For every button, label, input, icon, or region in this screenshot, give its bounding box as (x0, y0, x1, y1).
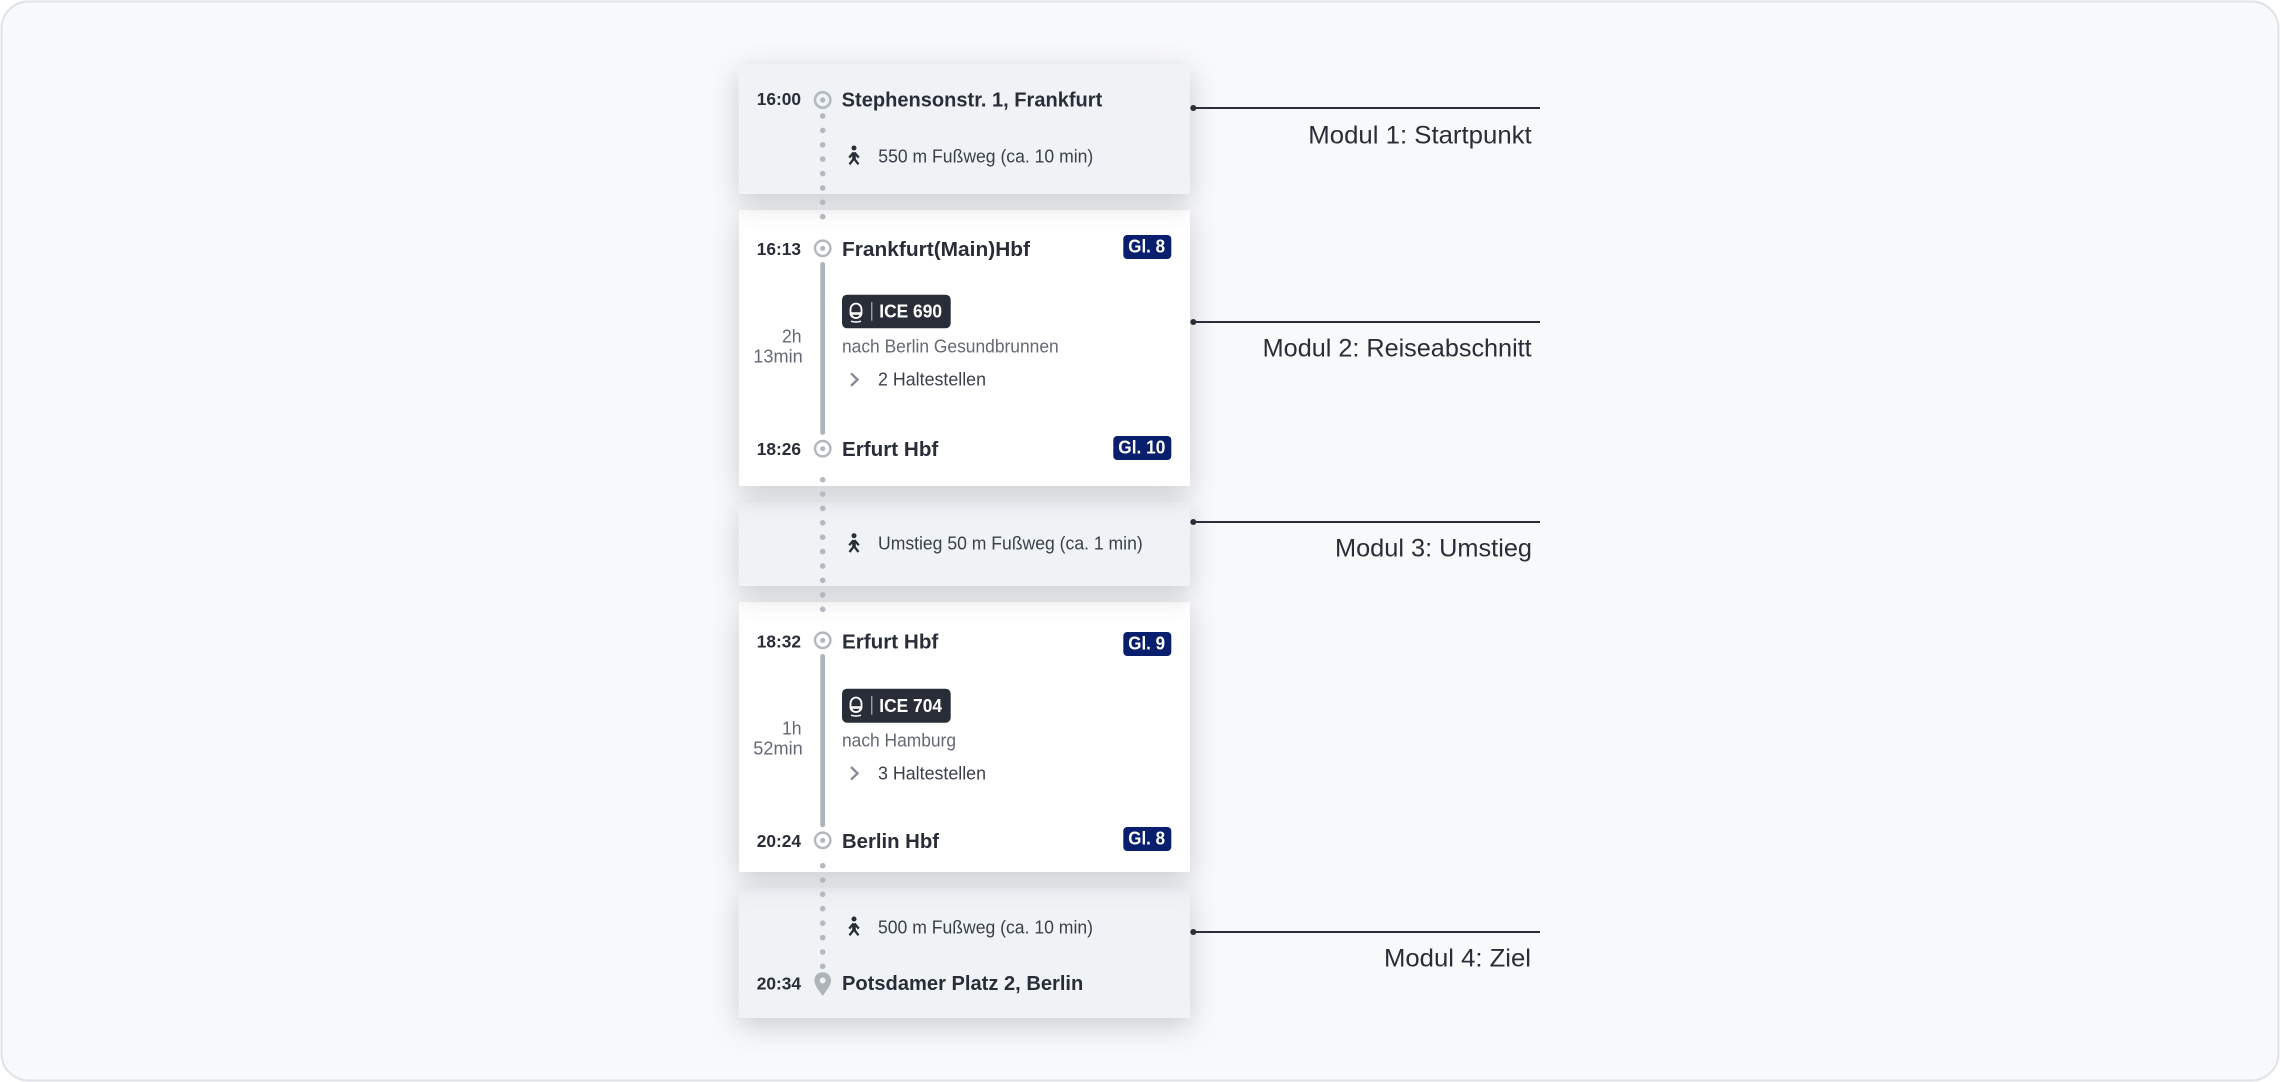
text: station Erfurt Hbf: Erfurt Hbf (842, 631, 939, 653)
icon: train front (850, 304, 862, 322)
text: start address: Stephensonstr. 1, Frankfurt (842, 90, 1103, 112)
text: station Berlin Hbf: Berlin Hbf (842, 831, 939, 853)
text: duration (753, 325, 803, 366)
badge: train ICE 704: ICE 704 (879, 696, 942, 716)
text: station Frankfurt(Main)Hbf: Frankfurt(Main)Hbf (842, 239, 1030, 261)
panel: module 2 first journey leg (739, 210, 1190, 486)
badge: platform 8: Gl. 8 (1128, 828, 1165, 848)
badge: platform 9: Gl. 9 (1128, 634, 1165, 654)
callout: module 1: Modul 1: Startpunkt (1308, 121, 1532, 149)
journey line (820, 654, 825, 827)
text: walking distance: 550 m Fußweg (ca. 10 min) (878, 146, 1093, 167)
icon: walking person (849, 533, 859, 552)
callout: module 3: Modul 3: Umstieg (1335, 535, 1532, 563)
text: stops: 2 Haltestellen (878, 368, 986, 389)
journey line (820, 262, 825, 435)
callout: module 1 (1190, 105, 1540, 149)
dotted walking connector 1 (820, 113, 826, 220)
icon: train front (850, 698, 862, 716)
panel: module 2 second journey leg (739, 602, 1190, 872)
icon: start ring (815, 92, 830, 108)
text: walking distance: 500 m Fußweg (ca. 10 min) (878, 916, 1093, 937)
icon: station ring (815, 633, 830, 648)
icon: destination pin (814, 972, 831, 996)
text: duration: 2h (782, 325, 802, 346)
icon: station ring (815, 833, 830, 848)
time: departure Frankfurt: 16:13 (757, 239, 801, 259)
callout: module 3 (1190, 519, 1540, 563)
badge: platform 8 (1123, 827, 1171, 851)
time: arrival destination: 20:34 (757, 973, 801, 993)
callout: module 4: Modul 4: Ziel (1384, 945, 1531, 973)
icon: walking person (849, 146, 859, 164)
time: departure start: 16:00 (757, 89, 801, 109)
text: train destination: nach Berlin Gesundbrunnen (842, 335, 1059, 356)
time: arrival Erfurt: 18:26 (757, 439, 801, 459)
badge: train ICE 704 (842, 689, 951, 723)
time: departure Erfurt: 18:32 (757, 631, 801, 651)
text: duration: 52min (753, 737, 803, 758)
text: duration: 13min (753, 345, 803, 366)
icon: station ring (815, 441, 830, 456)
panel: module 4 destination (738, 888, 1190, 1018)
icon: chevron (851, 767, 858, 780)
badge: platform 9 (1123, 632, 1171, 656)
callout: module 4 (1190, 929, 1540, 973)
text: stops: 3 Haltestellen (878, 762, 986, 783)
text: duration (753, 717, 803, 758)
icon: chevron (851, 373, 858, 386)
callout: module 2 (1190, 319, 1540, 363)
badge: train ICE 690: ICE 690 (879, 302, 942, 322)
text: station Erfurt Hbf: Erfurt Hbf (842, 439, 939, 461)
badge: platform 8 (1123, 235, 1171, 259)
text: destination address: Potsdamer Platz 2, Berlin (842, 973, 1083, 995)
badge: platform 8: Gl. 8 (1128, 236, 1165, 256)
icon: walking person (849, 916, 859, 935)
text: train destination: nach Hamburg (842, 730, 956, 751)
time: arrival Berlin: 20:24 (757, 831, 801, 851)
callout: module 2: Modul 2: Reiseabschnitt (1263, 335, 1532, 363)
text: duration: 1h (782, 717, 802, 738)
badge: train ICE 690 (842, 295, 951, 328)
badge: platform 10: Gl. 10 (1118, 438, 1165, 458)
dotted walking connector 2 (820, 477, 826, 612)
icon: station ring (815, 241, 830, 256)
text: transfer walking distance: Umstieg 50 m Fußweg (ca. 1 min) (878, 532, 1143, 553)
panel: module 3 transfer (738, 502, 1190, 586)
panel: module 1 start (738, 64, 1190, 194)
dotted walking connector 3 (820, 863, 826, 969)
